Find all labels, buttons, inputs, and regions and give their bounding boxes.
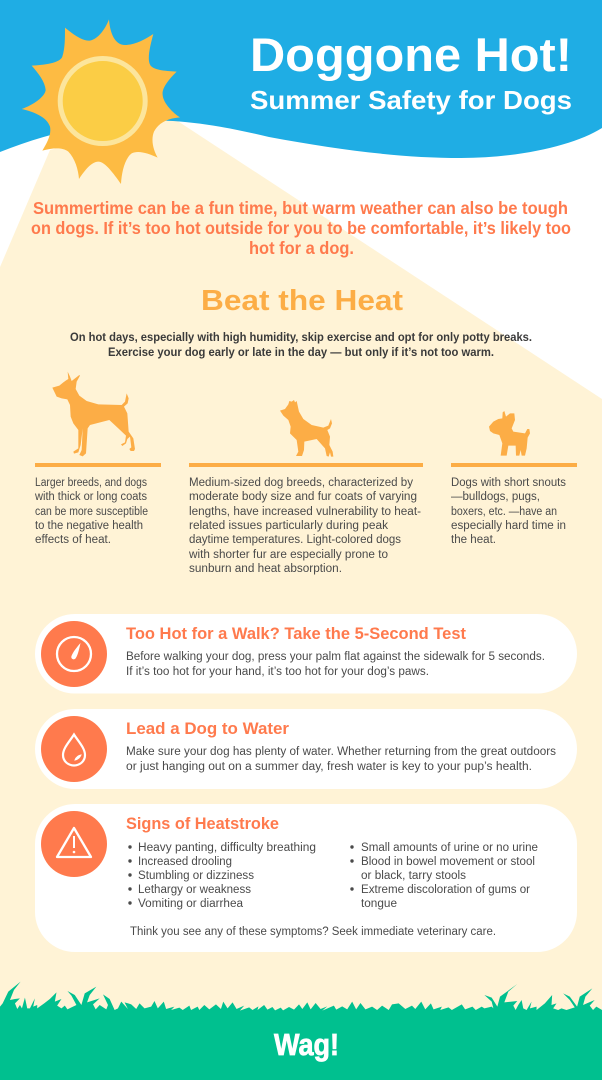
- icon: water drop: [41, 716, 107, 782]
- text: medium breeds: related issues particularly during peak: [189, 520, 388, 532]
- heading: Signs of Heatstroke: [126, 815, 279, 833]
- subheading text: [70, 332, 532, 359]
- heading: Lead a Dog to Water: [126, 720, 290, 738]
- symptom list left: Lethargy or weakness: [138, 884, 251, 896]
- symptom list right: [350, 842, 538, 910]
- icon: medium dog: [280, 400, 333, 457]
- body text: Before walking your dog, press your palm flat against the sidewalk for 5 seconds.: [126, 651, 545, 663]
- heading: Too Hot for a Walk? Take the 5-Second Test: [126, 625, 466, 643]
- text: medium breeds: daytime temperatures. Light-colored dogs: [189, 534, 401, 546]
- text: medium breeds: moderate body size and fur coats of varying: [189, 491, 417, 503]
- text: medium breeds: [188, 477, 421, 575]
- symptom list left: Increased drooling: [138, 856, 232, 868]
- intro text: on dogs. If it’s too hot outside for you to be comfortable, it’s likely too: [31, 218, 571, 238]
- intro text: hot for a dog.: [249, 238, 354, 258]
- symptom list left: Stumbling or dizziness: [138, 870, 254, 882]
- text: short snouts: [451, 477, 566, 546]
- subheading text: Exercise your dog early or late in the day — but only if it’s not too warm.: [108, 347, 494, 359]
- panel: five-second test: [35, 614, 577, 694]
- subheading text: On hot days, especially with high humidity, skip exercise and opt for only potty breaks.: [70, 332, 532, 344]
- intro text: [31, 198, 571, 258]
- body text: or just hanging out on a summer day, fresh water is key to your pup’s health.: [126, 761, 532, 773]
- icon: small dog: [489, 411, 530, 456]
- panel: water: [35, 709, 577, 789]
- symptom list right: Blood in bowel movement or stool: [361, 856, 535, 868]
- body text: [126, 651, 545, 678]
- text: short snouts: boxers, etc. —have an: [451, 506, 557, 518]
- icon: sun: [22, 19, 180, 184]
- symptom list right: Small amounts of urine or no urine: [361, 842, 538, 854]
- intro text: Summertime can be a fun time, but warm weather can also be tough: [33, 198, 568, 218]
- text: medium breeds: Medium-sized dog breeds, characterized by: [189, 477, 413, 489]
- body text: [126, 746, 556, 773]
- text: medium breeds: sunburn and heat absorption.: [189, 563, 342, 575]
- text: large breeds: effects of heat.: [35, 534, 111, 546]
- heading: Beat the Heat: Beat the Heat: [201, 285, 403, 317]
- symptom list right: or black, tarry stools: [361, 870, 466, 882]
- grass footer: [0, 982, 602, 1080]
- title: Doggone Hot!: [250, 28, 572, 81]
- icon: large dog: [52, 372, 135, 456]
- symptom list left: [128, 842, 316, 910]
- panel: heatstroke: [35, 804, 577, 952]
- text: short snouts: the heat.: [451, 534, 496, 546]
- text: medium breeds: lengths, have increased vulnerability to heat-: [189, 506, 421, 518]
- text: large breeds: Larger breeds, and dogs: [35, 477, 147, 489]
- body text: If it’s too hot for your hand, it’s too hot for your dog’s paws.: [126, 666, 429, 678]
- symptom list left: Heavy panting, difficulty breathing: [138, 842, 316, 854]
- text: short snouts: —bulldogs, pugs,: [451, 491, 540, 503]
- text: large breeds: with thick or long coats: [34, 491, 147, 503]
- icon: warning: [41, 811, 107, 877]
- text: short snouts: especially hard time in: [451, 520, 566, 532]
- text: medium breeds: with shorter fur are especially prone to: [188, 549, 388, 561]
- text: large breeds: to the negative health: [35, 520, 143, 532]
- blue sky header: [0, 0, 602, 158]
- veterinary note: Think you see any of these symptoms? Seek immediate veterinary care.: [130, 926, 496, 938]
- text: large breeds: can be more susceptible: [35, 506, 148, 518]
- text: short snouts: Dogs with short snouts: [451, 477, 566, 489]
- Wag logo: Wag!: [274, 1027, 339, 1062]
- symptom list right: tongue: [361, 898, 397, 910]
- icon: gauge: [41, 621, 107, 687]
- symptom list right: Extreme discoloration of gums or: [361, 884, 530, 896]
- divider bars: [35, 463, 577, 467]
- symptom list left: Vomiting or diarrhea: [138, 898, 244, 910]
- text: large breeds: [34, 477, 148, 546]
- title: [250, 28, 572, 115]
- body text: Make sure your dog has plenty of water. Whether returning from the great outdoors: [126, 746, 556, 758]
- title: Summer Safety for Dogs: [250, 85, 572, 115]
